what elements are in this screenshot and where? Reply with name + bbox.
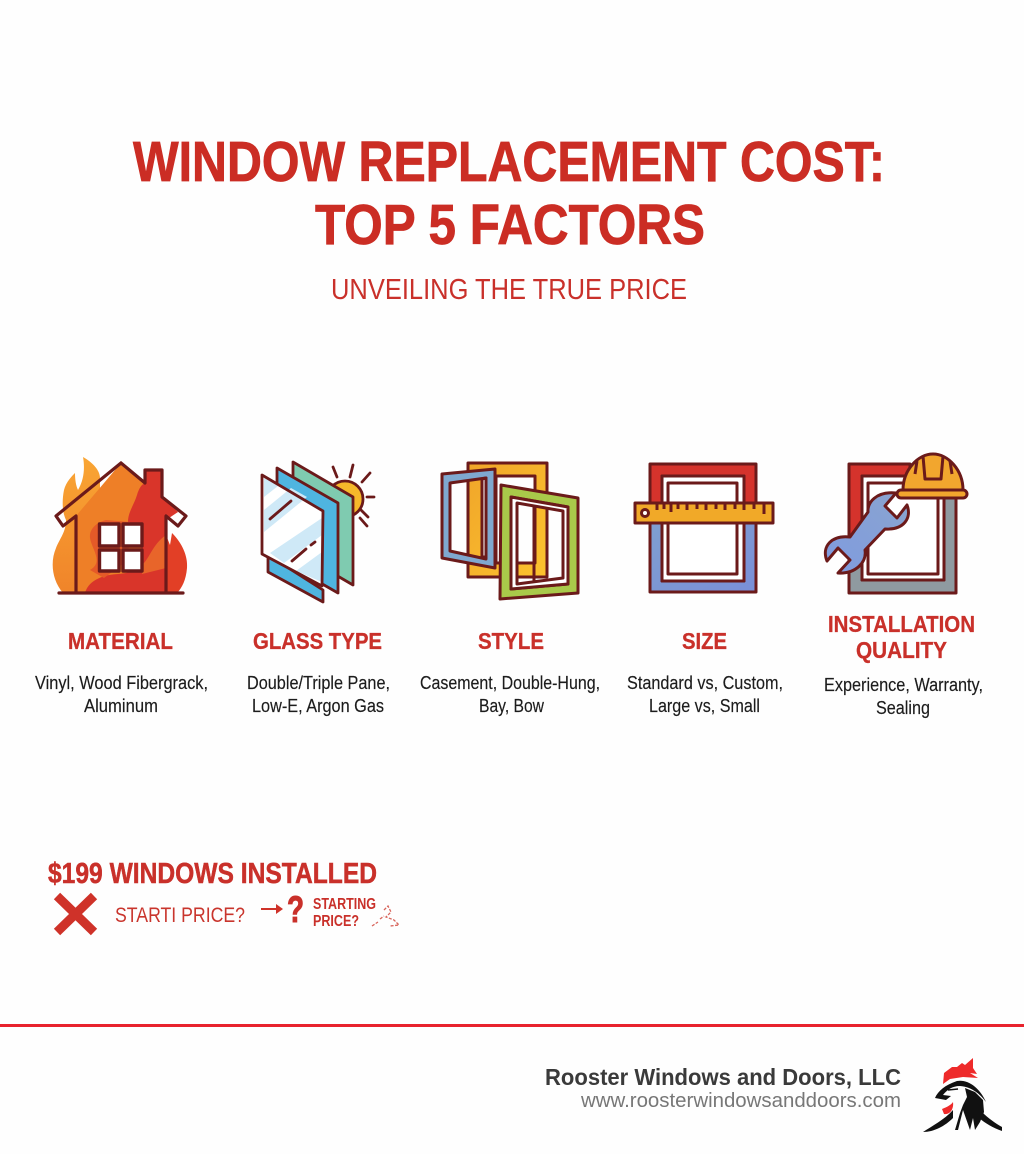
description: material: Vinyl, Wood Fibergrack, bbox=[35, 673, 208, 693]
callout heading: $199 WINDOWS INSTALLED bbox=[48, 858, 377, 890]
callout: $199 windows bbox=[48, 858, 399, 932]
title: TOP 5 FACTORS bbox=[315, 193, 705, 257]
icon: window, wrench and hard hat bbox=[825, 454, 967, 593]
heading: installation quality: QUALITY bbox=[856, 637, 947, 663]
factor: installation quality bbox=[824, 454, 983, 718]
heading: material: MATERIAL bbox=[68, 628, 173, 654]
description: size bbox=[627, 673, 783, 716]
description: installation quality: Sealing bbox=[876, 698, 930, 718]
icon: arrow bbox=[261, 904, 283, 914]
description: size: Standard vs, Custom, bbox=[627, 673, 783, 693]
description: material bbox=[35, 673, 208, 716]
heading: glass type: GLASS TYPE bbox=[253, 628, 382, 654]
description: installation quality: Experience, Warranty, bbox=[824, 675, 983, 695]
description: glass type: Low-E, Argon Gas bbox=[252, 696, 384, 716]
icon: question mark: ? bbox=[287, 889, 304, 930]
logo: rooster bbox=[923, 1058, 1002, 1132]
footer company bbox=[545, 1064, 901, 1112]
icon: window styles bbox=[442, 463, 578, 599]
description: installation quality bbox=[824, 675, 983, 718]
description: glass type: Double/Triple Pane, bbox=[247, 673, 390, 693]
icon: glass panes and sun bbox=[262, 462, 374, 602]
title bbox=[133, 130, 885, 257]
icon: window and ruler bbox=[635, 464, 773, 592]
title: WINDOW REPLACEMENT COST: bbox=[133, 130, 885, 194]
factor: glass type bbox=[247, 462, 390, 716]
company name: Rooster Windows and Doors, LLC bbox=[545, 1064, 901, 1090]
website: www.roosterwindowsanddoors.com bbox=[580, 1090, 901, 1112]
icon: red x bbox=[57, 896, 94, 932]
heading: style: STYLE bbox=[478, 628, 544, 654]
text: starting price: STARTI PRICE? bbox=[115, 904, 245, 927]
description: style: Casement, Double-Hung, bbox=[420, 673, 600, 693]
text: starting price small bbox=[313, 896, 376, 930]
factor: style bbox=[420, 463, 600, 716]
subtitle: UNVEILING THE TRUE PRICE bbox=[331, 274, 687, 306]
icon: faded scribble bbox=[372, 906, 399, 926]
footer divider bbox=[0, 1024, 1024, 1027]
description: size: Large vs, Small bbox=[649, 696, 760, 716]
heading: size: SIZE bbox=[682, 628, 727, 654]
description: style: Bay, Bow bbox=[479, 696, 545, 716]
factor: material bbox=[35, 457, 208, 716]
description: glass type bbox=[247, 673, 390, 716]
heading: installation quality bbox=[828, 611, 975, 663]
factor: size bbox=[627, 464, 783, 716]
icon: burning house bbox=[53, 457, 187, 593]
text: starting price small: STARTING bbox=[313, 896, 376, 913]
description: style bbox=[420, 673, 600, 716]
heading: installation quality: INSTALLATION bbox=[828, 611, 975, 637]
description: material: Aluminum bbox=[84, 696, 158, 716]
text: starting price small: PRICE? bbox=[313, 913, 359, 930]
